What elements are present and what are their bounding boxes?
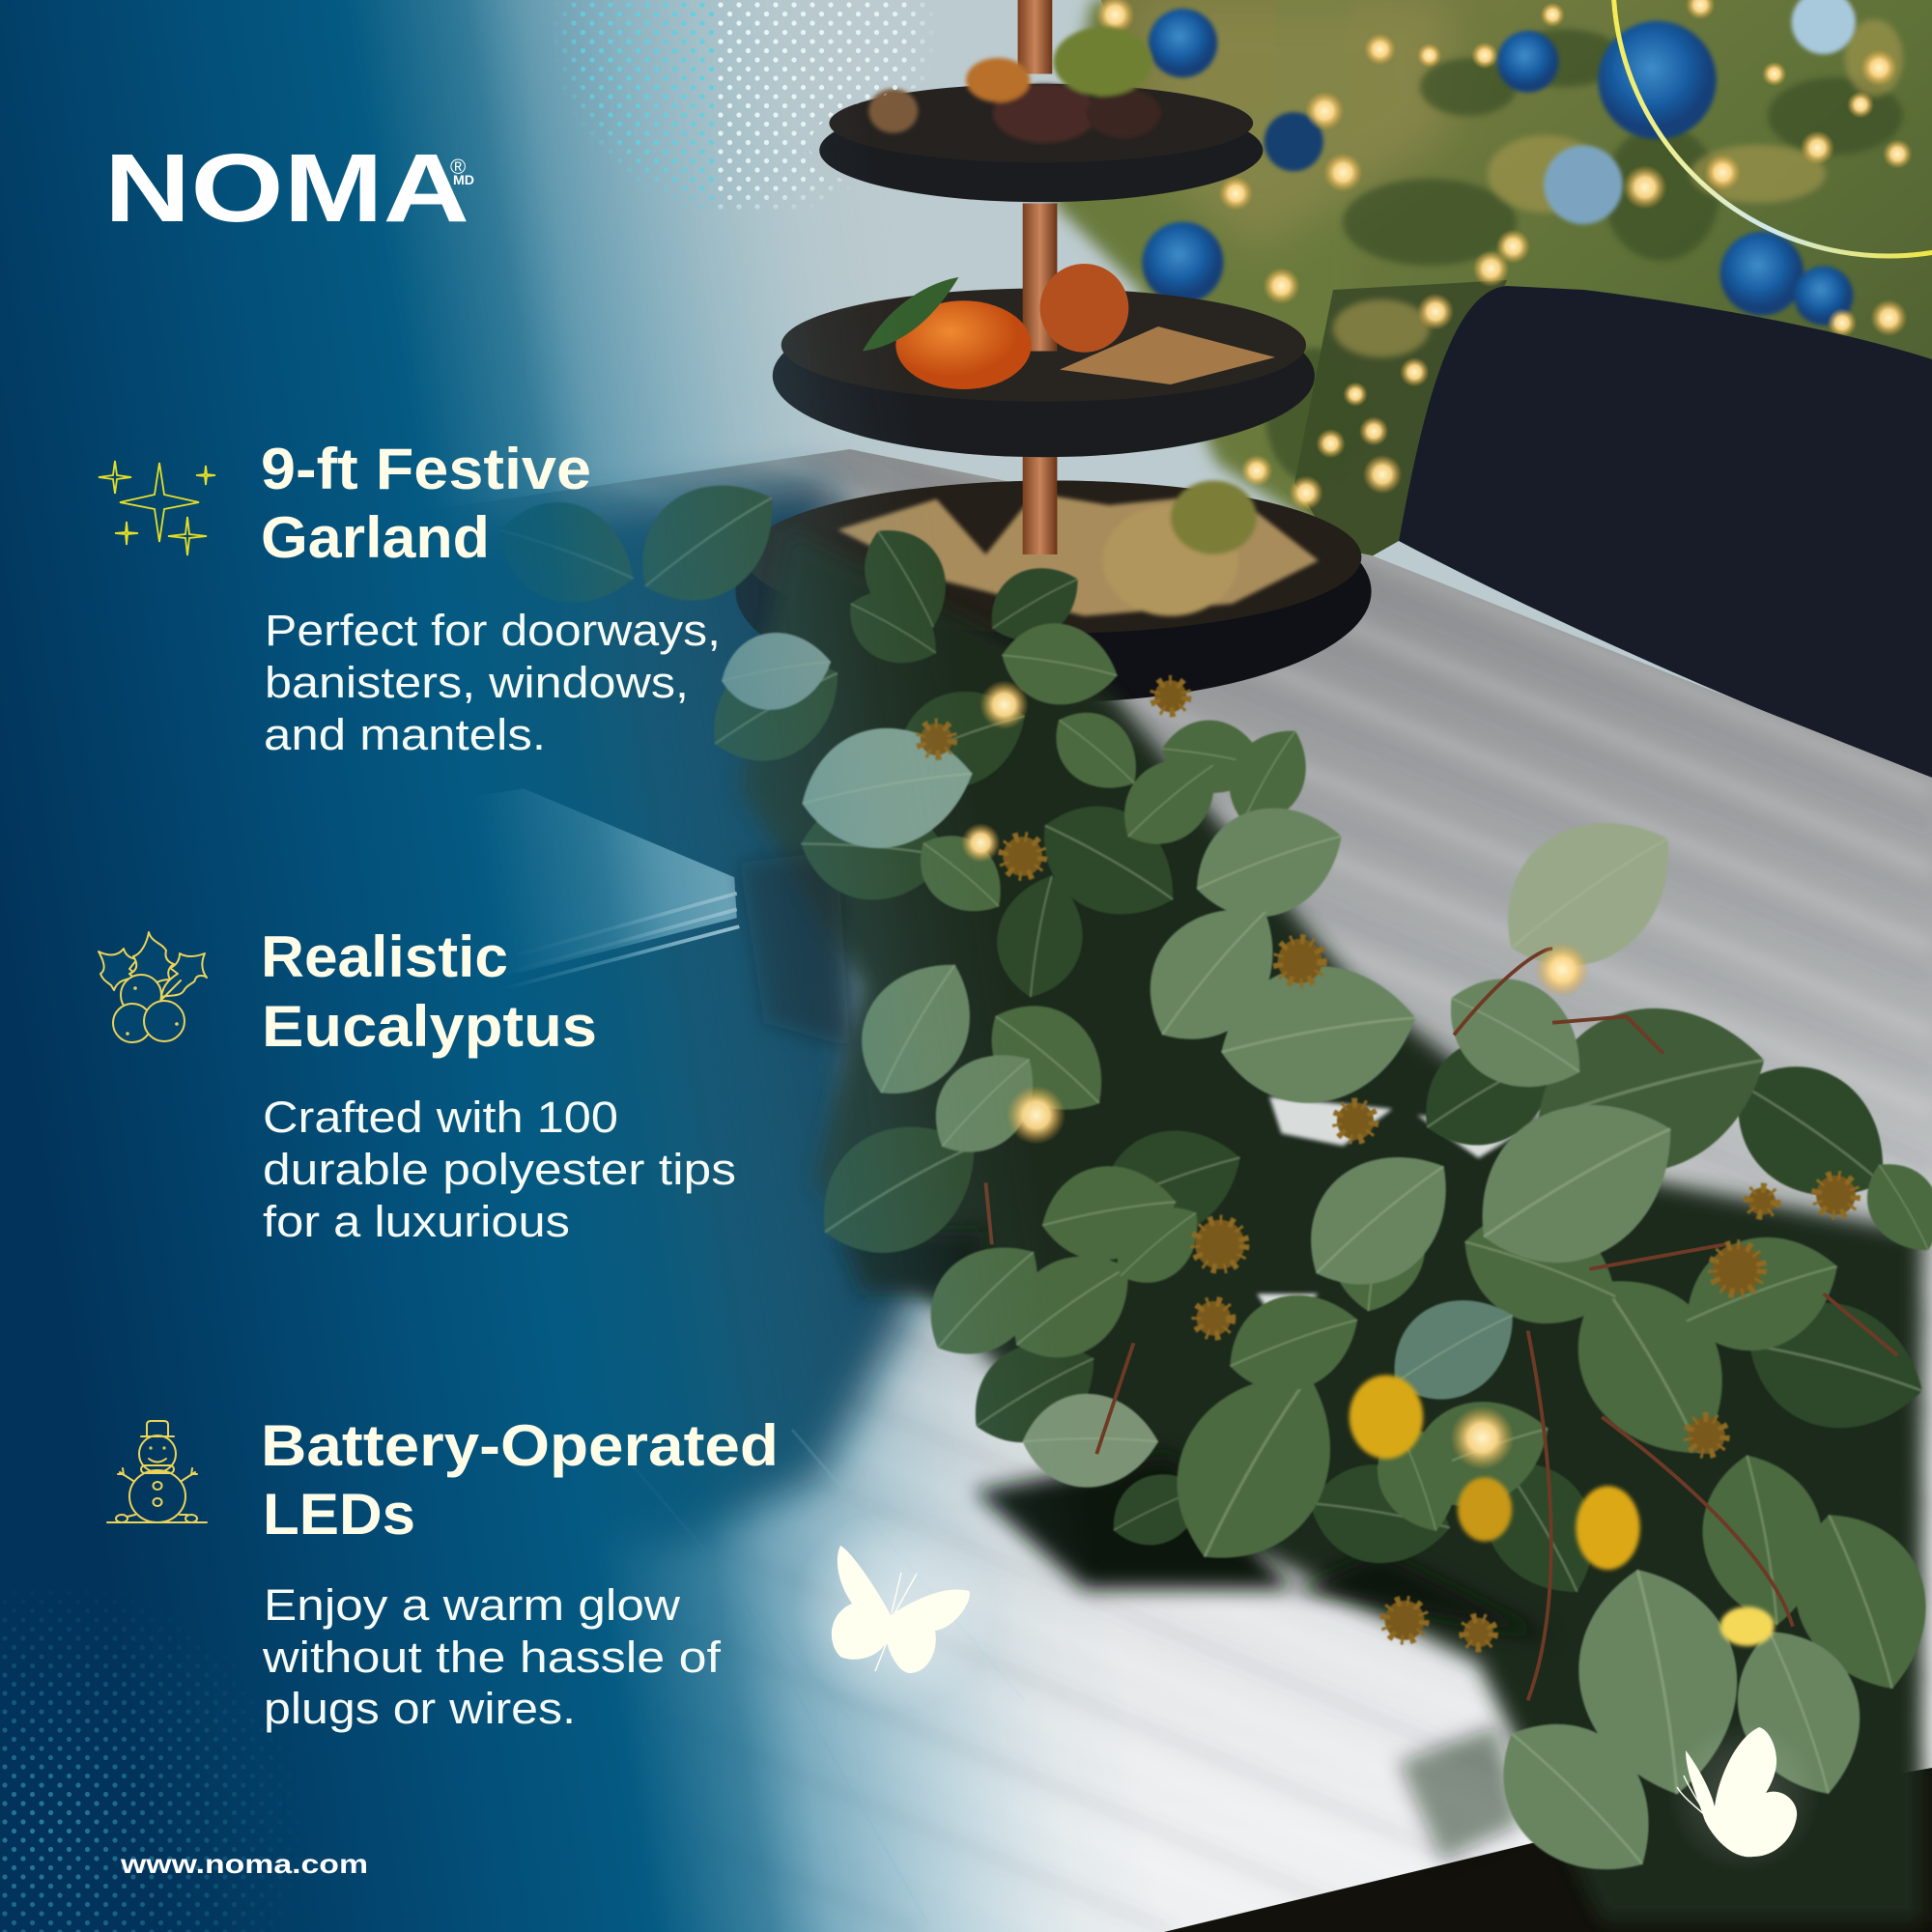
body text: banisters, windows, bbox=[265, 658, 689, 707]
butterfly left bbox=[792, 1510, 995, 1713]
heading: LEDs bbox=[263, 1482, 415, 1547]
middle tier bbox=[773, 203, 1315, 457]
front table edge bbox=[1164, 1768, 1932, 1932]
halftone dots bottom left bbox=[2, 1604, 273, 1932]
dining chair bbox=[1399, 286, 1932, 778]
body text: Enjoy a warm glow bbox=[264, 1580, 681, 1630]
heading: 9-ft Festive bbox=[261, 437, 591, 501]
body text bbox=[263, 1093, 736, 1246]
body text: durable polyester tips bbox=[263, 1145, 736, 1194]
feature: realistic eucalyptus bbox=[99, 924, 736, 1246]
logo: ® bbox=[450, 155, 466, 179]
body text bbox=[264, 606, 721, 759]
body text: for a luxurious bbox=[263, 1197, 570, 1246]
logo: NOMA bbox=[104, 134, 469, 242]
table top bbox=[509, 449, 1932, 1932]
garland shadow mass bbox=[739, 529, 1922, 1922]
body text: Crafted with 100 bbox=[263, 1093, 618, 1142]
heading: Battery-Operated bbox=[261, 1413, 779, 1478]
heading: Eucalyptus bbox=[262, 994, 597, 1059]
body text: and mantels. bbox=[264, 710, 546, 759]
body text bbox=[262, 1580, 722, 1733]
website url: www.noma.com bbox=[120, 1849, 368, 1879]
body text: Perfect for doorways, bbox=[265, 606, 721, 655]
heading bbox=[261, 924, 597, 1059]
stems bbox=[985, 949, 1897, 1700]
heading: Realistic bbox=[261, 924, 508, 989]
icon: snowman bbox=[107, 1421, 207, 1522]
cast shadows bbox=[739, 850, 1552, 1861]
logo: MD bbox=[453, 172, 474, 187]
tiered serving tray bbox=[735, 0, 1372, 702]
halftone dots top bbox=[556, 2, 930, 209]
dark table side bbox=[0, 483, 927, 1546]
body text: plugs or wires. bbox=[264, 1684, 576, 1733]
feature: 9-ft festive garland bbox=[99, 437, 721, 759]
heading bbox=[261, 1413, 779, 1547]
warm bulbs bbox=[961, 680, 1775, 1646]
stacked plates bbox=[443, 788, 739, 988]
christmas tree background bbox=[1053, 0, 1932, 570]
white gaps through the leaves bbox=[1257, 1023, 1725, 1331]
icon: holly and berries bbox=[99, 932, 207, 1042]
icon: sparkles bbox=[99, 461, 215, 555]
body text: without the hassle of bbox=[262, 1633, 722, 1682]
yellow arc top right bbox=[1613, 0, 1932, 256]
bottom tier bbox=[735, 480, 1372, 702]
heading bbox=[261, 437, 591, 570]
garland with leaves, bulbs and seed clusters bbox=[484, 453, 1932, 1922]
seed clusters bbox=[921, 680, 1856, 1647]
eucalyptus leaves bbox=[484, 453, 1932, 1909]
butterfly right bbox=[1666, 1719, 1821, 1874]
stem bbox=[1023, 456, 1057, 554]
top tier bbox=[819, 0, 1263, 202]
wood grain streaks on dark side bbox=[580, 1430, 1024, 1922]
feature: battery-operated LEDs bbox=[107, 1413, 779, 1733]
heading: Garland bbox=[261, 505, 490, 570]
